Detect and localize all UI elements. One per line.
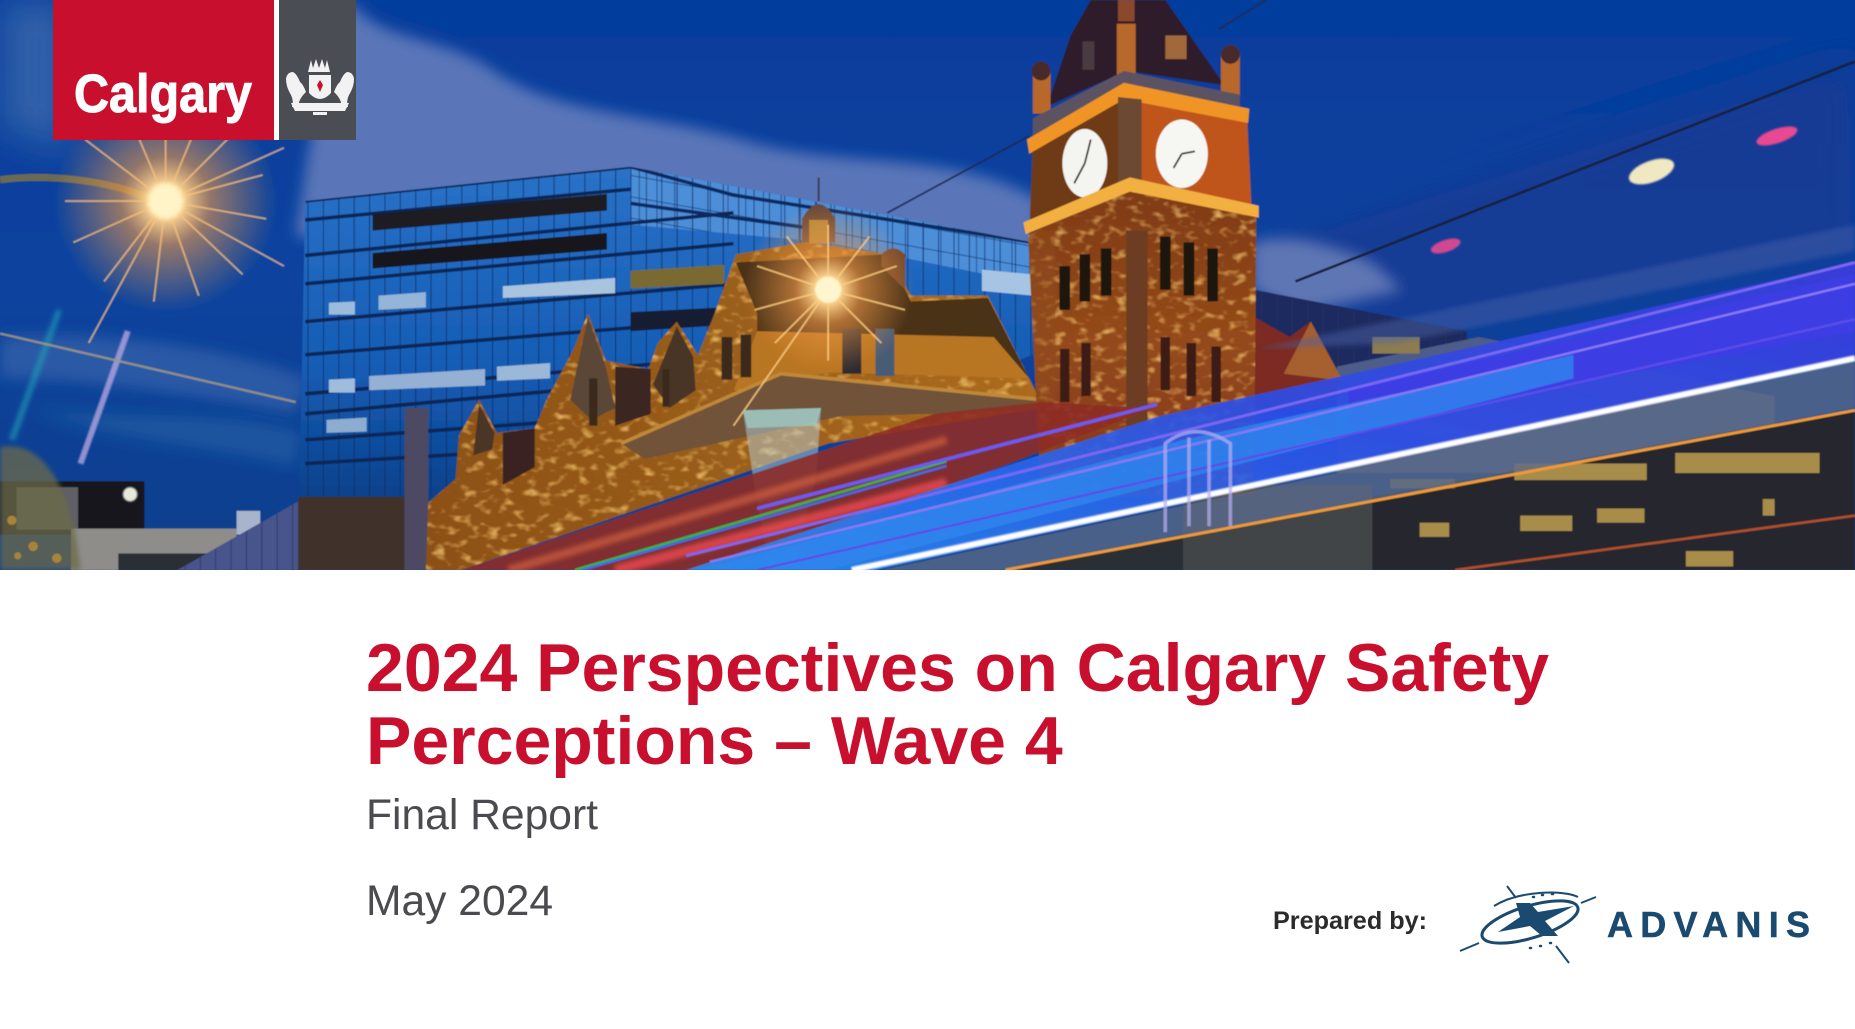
street lamp with starburst (0, 89, 284, 343)
subtitle: Final Report (366, 791, 598, 839)
orange trail (1006, 410, 1855, 570)
red street light trails (461, 402, 1153, 570)
City Hall building (420, 237, 1047, 574)
clouds (0, 0, 1855, 467)
overhead wire and motion blurs at right (1295, 61, 1855, 281)
tower parapet (1033, 71, 1240, 140)
panel: hero photograph of Calgary City Hall at dusk (0, 0, 1855, 570)
low buildings, tree and fence at lower left (0, 408, 428, 570)
bright white trail (852, 358, 1855, 570)
clock tower (1023, 0, 1260, 503)
logo: City of Calgary (53, 0, 356, 140)
stone column at tower corner (1118, 97, 1142, 189)
icon: orbit and cross emblem (1460, 886, 1596, 963)
red brick gable and fenced roof right of clock tower (1254, 290, 1775, 473)
photo scene (0, 0, 1855, 594)
tower window reflection in trails (1165, 432, 1230, 532)
logo: Advanis (1460, 885, 1810, 964)
dark lower building with lit windows at right (1006, 409, 1855, 570)
small cupola on City Hall (802, 177, 905, 290)
sky background (0, 0, 1855, 594)
blue and violet light trails (686, 225, 1855, 570)
grey crest panel (279, 0, 356, 140)
prepared by label: Prepared by: (1273, 907, 1427, 935)
red wordmark panel (53, 0, 274, 140)
lower cornice (1023, 177, 1259, 234)
wordmark: ADVANIS (1607, 904, 1810, 945)
title: 2024 Perspectives on Calgary Safety (366, 630, 1549, 706)
lens streaks and overhead wire at left (0, 0, 1266, 464)
translucent lantern street decoration (743, 408, 821, 565)
glass office tower (296, 166, 1041, 509)
title (366, 630, 1549, 779)
clock face left (1062, 129, 1107, 197)
tower roof (1047, 0, 1224, 106)
wordmark: Calgary (74, 64, 252, 124)
title: Perceptions – Wave 4 (366, 703, 1063, 779)
upper clock stage faces (1029, 88, 1126, 235)
white divider (274, 0, 279, 140)
icon: city crest (286, 59, 354, 115)
second lamp starburst (733, 205, 913, 426)
clock face right (1156, 119, 1208, 188)
lower orange-red trail (1455, 516, 1855, 570)
lower brick shaft (1023, 177, 1260, 503)
tower turrets (1032, 0, 1240, 114)
date: May 2024 (366, 877, 553, 925)
